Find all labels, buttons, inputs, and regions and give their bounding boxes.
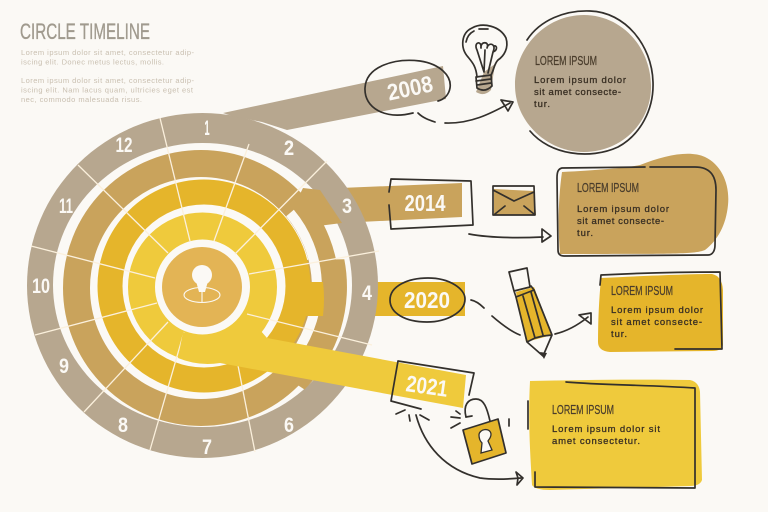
segment lines xyxy=(31,118,379,452)
ring numbers xyxy=(32,117,372,459)
card: 2020: Lorem ipsum dolor xyxy=(611,305,703,316)
intro text block: iscing elit. Nam lacus quam, ultricies eget est xyxy=(21,86,194,94)
arrow: pencil to card xyxy=(555,313,591,334)
ring numbers: 6 xyxy=(284,414,294,437)
intro text block: Lorem ipsum dolor sit amet, consectetur adip- xyxy=(21,76,194,85)
ring numbers: 9 xyxy=(59,355,69,378)
ring numbers: 2 xyxy=(284,137,294,160)
arrow: 2020 to pencil xyxy=(471,300,520,335)
card: 2014: Lorem ipsum dolor xyxy=(577,204,669,215)
icon: envelope xyxy=(493,186,536,215)
card: 2008: LOREM IPSUM xyxy=(535,54,597,68)
band: 2014 xyxy=(340,183,462,223)
title: CIRCLE TIMELINE xyxy=(20,19,150,44)
label: 2020: 2020 xyxy=(404,287,450,313)
card: 2008: Lorem ipsum dolor xyxy=(534,75,626,86)
ring numbers: 1 xyxy=(204,117,210,140)
band: 2020 xyxy=(300,282,465,316)
card: 2014: LOREM IPSUM xyxy=(577,181,639,195)
ring numbers: 4 xyxy=(362,282,372,305)
ring: third xyxy=(110,192,298,380)
intro text block: iscing elit. Donec metus lectus, mollis. xyxy=(21,58,164,66)
ring gap xyxy=(53,143,352,427)
ring numbers: 8 xyxy=(118,414,128,437)
label: 2008 xyxy=(365,60,450,115)
number 2 repeat: 2 xyxy=(284,137,294,160)
ring numbers: 10 xyxy=(32,275,50,298)
ring numbers: 7 xyxy=(202,436,212,459)
band 2014 joint xyxy=(298,188,342,226)
center disc xyxy=(162,247,242,327)
card: 2020: sit amet consecte- xyxy=(611,317,702,328)
ring: fourth xyxy=(142,226,264,348)
ring numbers: 3 xyxy=(342,195,352,218)
intro text block: nec, commodo malesuada risus. xyxy=(21,95,142,104)
icon: pencil xyxy=(509,268,552,359)
text: 1 xyxy=(204,117,210,140)
circle timeline xyxy=(27,113,379,459)
label: 2014: 2014 xyxy=(404,190,446,216)
arrow: 2014 to card xyxy=(469,229,551,242)
ring: outer years xyxy=(27,113,378,458)
card: 2008 xyxy=(515,11,653,154)
card: 2020 xyxy=(598,272,723,352)
ring: second xyxy=(76,164,326,412)
label: 2021 xyxy=(391,361,474,421)
ring: second extension xyxy=(290,259,347,390)
card: 2014 xyxy=(557,154,728,256)
label: 2014 xyxy=(389,179,473,229)
band: 2008 xyxy=(223,66,446,130)
card: 2021: LOREM IPSUM xyxy=(552,403,614,417)
icon: open padlock xyxy=(451,399,509,464)
card: 2020: tur. xyxy=(611,329,627,340)
label: 2020 xyxy=(390,278,465,322)
arrow: 2021 to card xyxy=(416,415,523,485)
intro text block: Lorem ipsum dolor sit amet, consectetur adip- xyxy=(21,48,194,57)
label: 2008: 2008 xyxy=(385,70,435,105)
ring gap right xyxy=(290,213,317,353)
card: 2014: tur. xyxy=(577,228,593,239)
card: 2021: amet consectetur. xyxy=(552,436,640,447)
band: 2021 xyxy=(178,314,466,408)
label: 2021: 2021 xyxy=(404,370,450,402)
card: 2020: LOREM IPSUM xyxy=(611,284,673,298)
icon: light bulb xyxy=(463,25,507,94)
intro text block xyxy=(21,48,194,104)
ring numbers: 12 xyxy=(116,134,132,157)
band: 2020 inner xyxy=(300,282,324,316)
card: 2014: sit amet consecte- xyxy=(577,216,664,227)
ring numbers: 11 xyxy=(59,195,73,218)
card: 2021 xyxy=(528,380,702,490)
arrow: 2008 to card xyxy=(418,100,513,123)
card: 2021: Lorem ipsum dolor sit xyxy=(552,424,660,435)
icon: person xyxy=(184,265,220,302)
card: 2008: tur. xyxy=(534,99,550,110)
card: 2008: sit amet consecte- xyxy=(534,87,621,98)
